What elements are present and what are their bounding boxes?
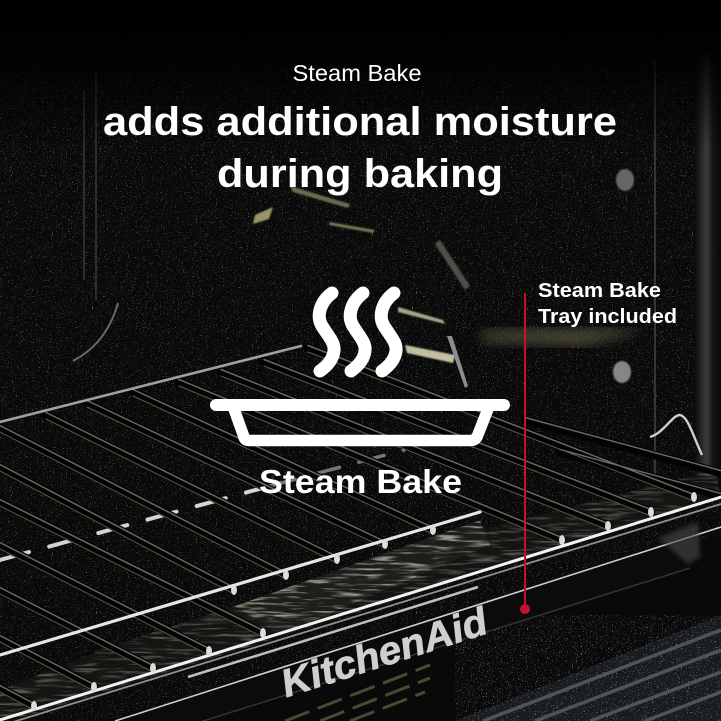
icon: steam bake pan (216, 293, 504, 440)
subtitle: Steam Bake (292, 60, 422, 86)
oven rack wires (0, 346, 721, 721)
icon label: Steam Bake (259, 463, 462, 500)
icon: steam waves (319, 293, 396, 371)
callout text: Steam Bake (538, 280, 661, 302)
brand logo: KitchenAid: KitchenAid (276, 600, 494, 706)
callout pointer (520, 293, 530, 614)
icon: pan rim (216, 399, 504, 411)
steam tray front band (115, 522, 721, 721)
headline: during baking (217, 152, 503, 196)
rack rods (0, 346, 721, 710)
upper front rail (0, 512, 480, 655)
wall knobs (616, 169, 634, 191)
reflective rack shelf sheen (0, 470, 721, 721)
cross wire (0, 450, 404, 560)
icon: pan body (234, 409, 488, 440)
top fade (0, 0, 721, 150)
oven floor (150, 535, 721, 721)
side tube (695, 55, 721, 495)
callout text (538, 280, 677, 328)
lower front rail (0, 497, 721, 720)
headline (103, 100, 617, 196)
side support wave (650, 415, 702, 455)
callout text: Tray included (538, 306, 677, 328)
rear rail (0, 346, 301, 422)
rod ends (31, 492, 697, 711)
wall reflections (73, 60, 655, 480)
headline: adds additional moisture (103, 100, 617, 144)
